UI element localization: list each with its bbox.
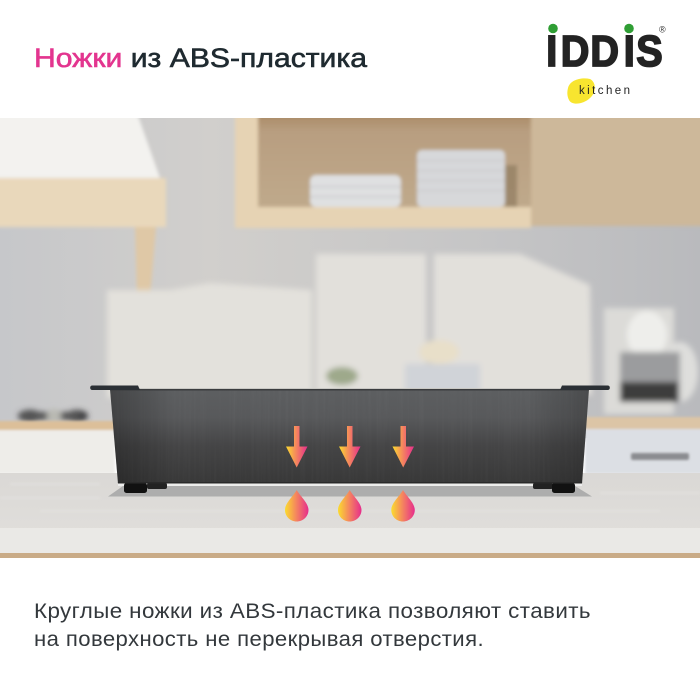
kitchen photo background bbox=[0, 110, 700, 558]
countertop front highlight bbox=[0, 528, 700, 553]
coffee machine body bbox=[604, 308, 674, 414]
logo: kitchen: kitchen bbox=[579, 85, 630, 97]
logo: IDDIS kitchen bbox=[546, 24, 666, 104]
hood bracket bbox=[135, 227, 156, 298]
description text: на поверхность не перекрывая отверстия. bbox=[34, 627, 484, 651]
arrow 2 bbox=[339, 426, 360, 468]
arrow 1 bbox=[286, 426, 308, 468]
tall plates bbox=[417, 150, 505, 207]
sink body bbox=[110, 389, 589, 484]
stove burners bbox=[18, 410, 42, 422]
back counter wood edge bbox=[0, 421, 115, 430]
wall shelf cabinet bbox=[235, 110, 531, 228]
toaster bbox=[405, 364, 480, 388]
description text: Круглые ножки из ABS-пластика позволяют ставить bbox=[34, 599, 591, 623]
drop 1 bbox=[285, 490, 308, 522]
shelf interior bbox=[258, 110, 531, 207]
small plates bbox=[310, 175, 401, 207]
coffee flask top bbox=[627, 311, 667, 359]
title: Ножки из ABS-пластика bbox=[34, 43, 368, 73]
light rim under sink bbox=[118, 483, 582, 486]
back legs bbox=[147, 483, 167, 489]
bread bbox=[419, 340, 459, 364]
description text bbox=[34, 599, 591, 651]
countertop streaks bbox=[0, 483, 700, 512]
cabinet handle bbox=[631, 453, 689, 460]
countertop bbox=[0, 473, 700, 528]
shadow by plates bbox=[505, 165, 517, 207]
wall bbox=[0, 118, 700, 438]
sink shading bbox=[105, 389, 595, 484]
hood wooden band bbox=[0, 178, 166, 227]
arrow 3 bbox=[392, 426, 414, 468]
drop 3 bbox=[391, 490, 415, 522]
drops bbox=[285, 490, 415, 522]
logo: wordmark: IDDIS bbox=[546, 26, 663, 75]
white tiles bbox=[107, 283, 312, 398]
logo: green dots bbox=[548, 24, 634, 33]
logo: registered mark: ® bbox=[659, 24, 666, 34]
left flange bbox=[90, 386, 140, 390]
right flange bbox=[560, 386, 610, 390]
arrows bbox=[286, 426, 414, 468]
logo: yellow blob bbox=[567, 78, 595, 104]
coffee mug handle bbox=[672, 340, 700, 404]
light top edge bbox=[138, 388, 562, 389]
coffee flask bbox=[620, 352, 680, 402]
plant bbox=[326, 367, 358, 385]
front legs bbox=[124, 483, 147, 493]
right cabinet bbox=[531, 110, 700, 226]
lower cabinets bbox=[0, 430, 115, 474]
plate stripes bbox=[310, 160, 505, 198]
sink bbox=[90, 386, 610, 496]
cut-out shadow bbox=[108, 486, 592, 496]
countertop wood edge bbox=[0, 553, 700, 558]
range hood bbox=[0, 110, 160, 178]
drop 2 bbox=[338, 490, 362, 522]
